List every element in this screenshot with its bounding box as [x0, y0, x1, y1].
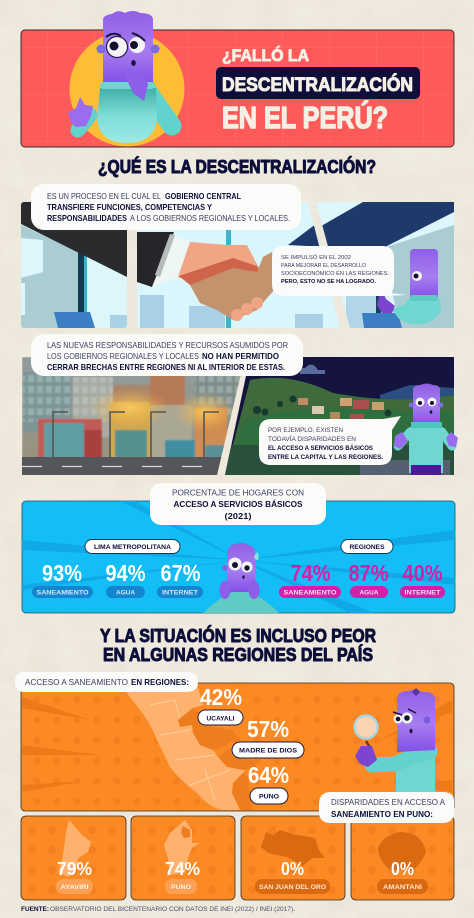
heading: worse situation: [100, 625, 376, 665]
stat: puno: PUNO: [259, 794, 279, 800]
panel: header banner: [21, 11, 454, 147]
stat: lima agua: AGUA: [116, 590, 135, 596]
character: worried figure: [203, 543, 279, 613]
heading: qué es la descentralización: ¿QUÉ ES LA DESCENTRALIZACIÓN?: [98, 156, 376, 177]
card: amantani: AMANTANI: [383, 884, 422, 891]
stat: regiones saneamiento: SANEAMIENTO: [284, 590, 336, 596]
card: puno: [131, 816, 235, 900]
title: descentralización box: [216, 67, 420, 99]
stat: regiones agua: 87%: [348, 560, 388, 586]
stat: puno: 64%: [248, 762, 289, 788]
callout: chart title: [150, 483, 326, 525]
callout: disparidades en puno: SANEAMIENTO EN PUNO:: [331, 810, 433, 819]
scene: city at dusk: [22, 357, 247, 475]
speech bubble: definition: TRANSFIERE FUNCIONES, COMPETENCIAS Y: [47, 202, 212, 212]
callout: chart title: ACCESO A SERVICIOS BÁSICOS: [174, 499, 303, 509]
stat: lima internet: [157, 560, 203, 598]
source note: FUENTE:: [21, 906, 49, 913]
speech bubble: responsibilities: NO HAN PERMITIDO: [202, 351, 280, 361]
card: ayaviri: [21, 816, 126, 900]
speech bubble: 2002: [272, 246, 407, 296]
stat: ucayali: [198, 684, 243, 725]
stat: regiones internet: INTERNET: [404, 590, 441, 596]
stat: madre de dios: 57%: [247, 716, 289, 742]
callout: acceso a saneamiento: ACCESO A SANEAMIENTO: [25, 677, 129, 687]
scene: right office: [316, 202, 454, 328]
region: ucayali: [178, 708, 237, 750]
speech bubble: responsibilities: LOS GOBIERNOS REGIONALES Y LOCALES: [47, 351, 199, 361]
stat: madre de dios: MADRE DE DIOS: [239, 748, 297, 754]
scene: left office: [21, 202, 127, 328]
stat: lima saneamiento: 93%: [42, 560, 82, 586]
speech bubble: definition: RESPONSABILIDADES: [47, 213, 127, 223]
scene: night village: [225, 357, 454, 475]
speech bubble: 2002: PERO, ESTO NO SE HA LOGRADO.: [281, 279, 376, 285]
region: madre de dios: [218, 748, 257, 770]
title: falló la: ¿FALLÓ LA: [222, 46, 309, 65]
speech bubble: disparities: EL ACCESO A SERVICIOS BÁSICOS: [268, 443, 374, 452]
speech bubble: 2002: PARA MEJORAR EL DESARROLLO: [281, 263, 366, 269]
stat: lima saneamiento: SANEAMIENTO: [36, 590, 88, 596]
panel: household access to basic services: [22, 483, 455, 613]
stat: regiones saneamiento: [279, 560, 341, 598]
stat: lima saneamiento: [32, 560, 93, 598]
icon: yellow circle: [70, 32, 184, 146]
heading: worse situation: Y LA SITUACIÓN ES INCLUSO PEOR: [100, 625, 376, 646]
panel: handshake comic: [21, 184, 454, 328]
character: pointing figure: [377, 249, 441, 325]
card: san juan del oro: [241, 816, 345, 900]
map: peru: [120, 684, 257, 810]
speech bubble: definition: ES UN PROCESO EN EL CUAL EL: [47, 191, 161, 201]
stat: regiones agua: AGUA: [360, 590, 379, 596]
callout: acceso a saneamiento: [15, 672, 198, 692]
speech bubble: disparities: TODAVÍA DISPARIDADES EN: [268, 434, 356, 443]
card: puno: 74%: [165, 858, 200, 879]
stat: ucayali: 42%: [200, 684, 242, 710]
character: thinking figure: [68, 11, 172, 143]
panel: sanitation access map: [15, 672, 454, 811]
speech bubble: 2002: SE IMPULSÓ EN EL 2002: [281, 254, 351, 261]
stat: lima internet: 67%: [160, 560, 200, 586]
speech bubble: definition: A LOS GOBIERNOS REGIONALES Y LOCALES.: [130, 213, 290, 223]
speech bubble: disparities: POR EJEMPLO, EXISTEN: [268, 427, 343, 434]
card: san juan del oro: 0%: [281, 858, 304, 879]
callout: chart title: PORCENTAJE DE HOGARES CON: [172, 488, 304, 498]
callout: chart title: (2021): [224, 511, 252, 521]
card: amantani: 0%: [391, 858, 414, 879]
speech bubble: disparities: [259, 416, 401, 465]
stat: lima agua: 94%: [106, 560, 146, 586]
title: en el perú: EN EL PERÚ?: [222, 99, 388, 135]
stat: regiones saneamiento: 74%: [290, 560, 330, 586]
speech bubble: definition: GOBIERNO CENTRAL: [165, 191, 241, 201]
speech bubble: responsibilities: CERRAR BRECHAS ENTRE REGIONES NI AL INTERIOR DE ESTAS.: [47, 362, 285, 372]
character: detective with magnifier: [354, 688, 435, 795]
stat: lima internet: INTERNET: [162, 590, 199, 596]
speech bubble: responsibilities: [31, 334, 303, 376]
stat: regiones agua: [348, 560, 388, 598]
speech bubble: definition: [31, 184, 301, 230]
region: puno: [232, 773, 253, 810]
card: amantani: [351, 816, 454, 900]
character: shrugging figure: [394, 384, 458, 475]
stat: regiones internet: [400, 560, 445, 598]
stat: puno: [248, 762, 289, 804]
heading: worse situation: EN ALGUNAS REGIONES DEL PAÍS: [103, 644, 373, 665]
callout: disparidades en puno: [319, 792, 454, 823]
callout: disparidades en puno: DISPARIDADES EN ACCESO A: [331, 798, 446, 807]
speech bubble: disparities: ENTRE LA CAPITAL Y LAS REGIONES.: [268, 454, 383, 461]
source note: OBSERVATORIO DEL BICENTENARIO CON DATOS DE INEI (2022) / INEI (2017).: [50, 906, 295, 913]
title: descentralización box: DESCENTRALIZACIÓN: [222, 74, 413, 96]
card: puno: PUNO: [171, 884, 191, 891]
stat: lima agua: [106, 560, 146, 598]
label: regiones: REGIONES: [350, 544, 385, 551]
speech bubble: responsibilities: LAS NUEVAS RESPONSABILIDADES Y RECURSOS ASUMIDOS POR: [47, 340, 288, 350]
stat: regiones internet: 40%: [402, 560, 442, 586]
panel: city and countryside comic: [22, 334, 458, 475]
stat: madre de dios: [232, 716, 304, 758]
card: ayaviri: 79%: [57, 858, 92, 879]
callout: acceso a saneamiento: EN REGIONES:: [131, 677, 189, 687]
scene: middle handshake: [137, 202, 345, 328]
card: ayaviri: AYAVIRI: [60, 884, 89, 891]
panel: puno district cards: [21, 792, 454, 900]
stat: ucayali: UCAYALI: [206, 716, 235, 722]
label: regiones: [341, 540, 393, 554]
label: lima metropolitana: LIMA METROPOLITANA: [94, 544, 171, 551]
speech bubble: 2002: SOCIOECONÓMICO EN LAS REGIONES.: [281, 270, 389, 277]
label: lima metropolitana: [85, 540, 180, 554]
card: san juan del oro: SAN JUAN DEL ORO: [259, 884, 326, 891]
